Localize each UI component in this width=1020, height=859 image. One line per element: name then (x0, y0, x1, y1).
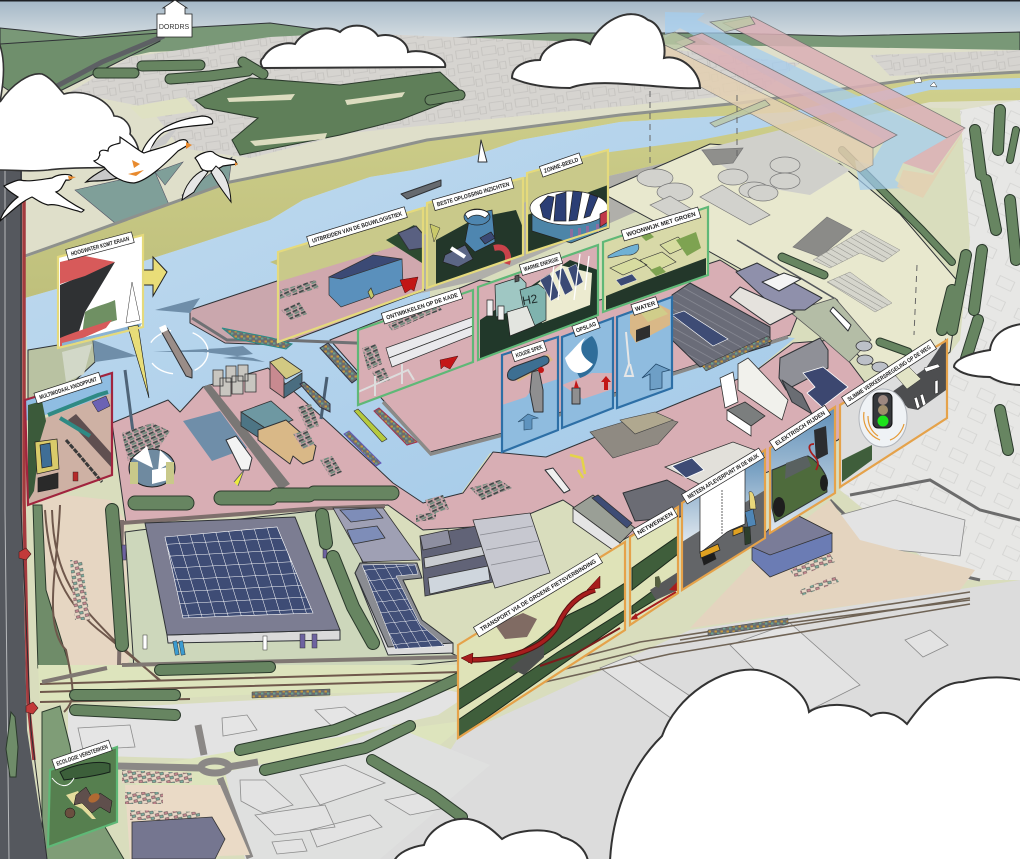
yellow excavators (570, 455, 585, 478)
wind turbines (550, 254, 589, 300)
train south-east (708, 618, 788, 636)
far town east (870, 50, 1020, 76)
train west (252, 689, 330, 698)
seagull left (0, 174, 84, 221)
pale tan west yard (40, 495, 130, 690)
up arrow (518, 414, 538, 430)
bat body (87, 792, 101, 804)
seagull right (182, 151, 238, 202)
boats and stacks south dock (416, 468, 570, 522)
wheels (773, 475, 828, 517)
blue boats east (702, 336, 772, 371)
sewage land (600, 144, 960, 377)
pale green bands (38, 665, 478, 805)
sailboat in view (126, 282, 140, 323)
green containers (388, 304, 442, 331)
treatment basins (637, 148, 852, 257)
frame yellow 2 content (427, 178, 523, 288)
teal fields (75, 157, 232, 223)
dark foliage (60, 762, 110, 780)
label: yellow frame 2: BESTE OPLOSSING INZICHTEN (436, 182, 510, 208)
label: blue frame 1: KOUDE SPEK (515, 345, 544, 360)
dark dock (203, 384, 290, 490)
far slab top (723, 17, 965, 138)
hydrogen plant (487, 275, 546, 336)
tree rows east (782, 110, 1016, 450)
label: yellow frame 3: ZONNE-BEELD (543, 157, 580, 175)
radar mast (125, 370, 133, 432)
label: green frame 2: WARME ENERGIE (523, 257, 559, 273)
yellow building (35, 439, 59, 492)
dark stripes building (782, 380, 812, 414)
northern pier rim (192, 318, 380, 344)
label: blue frame 3 (631, 297, 659, 315)
label: orange frame 3 (682, 448, 764, 504)
label: yellow detail frame: HOOGWATER KOMT ERAAN (71, 236, 130, 258)
grey hall with ridges (473, 513, 550, 588)
white warehouse (665, 442, 763, 488)
label: red frame: MULTIMODAAL KNOOPPUNT (39, 377, 98, 401)
railway west (40, 505, 460, 712)
label: yellow detail frame (66, 232, 134, 260)
container field west (122, 423, 170, 461)
orange frame 5 content (840, 338, 947, 487)
south land (pink) (112, 340, 878, 540)
frames (25, 150, 947, 847)
road behind east (830, 480, 1020, 580)
distant green hills (0, 23, 1020, 60)
label: orange frame 5: SLIMME VERKEERSREGELING OP DE WEG (847, 345, 933, 403)
yellow pointer (128, 325, 149, 398)
road west (42, 657, 462, 682)
H2 text: H2 (521, 291, 539, 308)
second solar warehouse (355, 563, 453, 655)
long parking west (70, 560, 90, 620)
radar vehicles (914, 364, 940, 409)
outlined lots (600, 500, 965, 721)
label: green frame 2 (519, 253, 563, 275)
river and harbour water (25, 78, 1020, 505)
top edge line (0, 0, 1020, 2)
pump tower (530, 370, 543, 412)
grey lots south-west (225, 725, 490, 859)
recycling yard (590, 412, 678, 458)
garden buildings (610, 237, 688, 275)
traffic light (873, 393, 892, 428)
solar panels on masts (540, 264, 583, 301)
near slab side (650, 38, 873, 172)
motorway (0, 170, 47, 859)
pale house (895, 365, 921, 389)
stacks on yard (790, 554, 839, 596)
white roof top (762, 273, 801, 291)
orange frame 4 content (770, 407, 835, 533)
red heat arrow (494, 247, 508, 264)
dark road (650, 572, 678, 600)
storage tanks round (856, 341, 888, 372)
quay cranes and vessels (222, 328, 417, 466)
red arrow (440, 356, 458, 369)
levee road (25, 72, 1020, 256)
field strips (813, 230, 900, 312)
purple building (333, 508, 420, 562)
crane bridge (358, 364, 414, 396)
green car (772, 456, 827, 522)
domed silo with white panels (129, 446, 175, 487)
white sensor arc (52, 778, 74, 786)
cross-section blocks: blue channel (650, 12, 965, 198)
brown road around ground (119, 506, 385, 669)
pale hall (640, 306, 668, 322)
frame green 1 content (358, 290, 473, 405)
grey quay road (330, 150, 760, 300)
blue building yard (752, 510, 832, 577)
west tree mass (33, 505, 70, 668)
white sensor circle (859, 389, 907, 447)
northern pier (190, 248, 425, 345)
distant road (42, 36, 164, 94)
frame yellow 3 content (527, 150, 609, 253)
red frame content (25, 373, 112, 505)
dark roof building (623, 480, 700, 521)
town north bank (70, 33, 800, 158)
center pier (330, 260, 800, 452)
median shrub (6, 712, 18, 777)
buildings south-west (240, 765, 450, 854)
frame green 2 content (478, 245, 598, 360)
brown mound (495, 613, 537, 639)
label: orange frame 4: ELEKTRISCH RIJDEN (775, 411, 827, 447)
yellow arrow (143, 257, 167, 296)
label: blue frame 3: WATER (634, 301, 657, 313)
barge on river (401, 180, 441, 199)
railway south-east (460, 592, 970, 692)
pale field (130, 97, 197, 119)
north olive bank (25, 72, 1020, 298)
white tubes (386, 317, 473, 367)
round tank with striped roof (530, 191, 609, 243)
grey treatment block (700, 130, 850, 195)
label: yellow frame 3 (539, 153, 583, 177)
lower west lot (68, 690, 468, 760)
orange frame 1 content (458, 542, 625, 738)
blue frames content (502, 297, 672, 452)
frame green bottom content (48, 747, 117, 847)
label: red frame (34, 372, 102, 404)
label: orange frame 3: METEEN AFLEVERPUNT IN DE WIJK (687, 453, 761, 501)
cloud bottom right (610, 670, 1020, 859)
cloud top left (0, 40, 139, 171)
dashed drop lines (650, 58, 917, 335)
big blue up arrow (642, 364, 670, 390)
wooden hall (258, 420, 316, 464)
grey tanks east (779, 338, 828, 390)
blue tower (443, 209, 495, 267)
people (570, 224, 599, 237)
forest mass north bank (98, 62, 465, 155)
white ridge roofs east (730, 287, 795, 325)
sky (0, 0, 1020, 60)
arrow heads (461, 576, 600, 664)
orange frame 3 content (682, 450, 765, 590)
cloud top right of centre (512, 14, 700, 88)
purple barge (92, 396, 110, 412)
tree line along warehouse (135, 493, 392, 503)
glass hall (241, 401, 293, 444)
label: blue frame 2 (572, 317, 600, 337)
near slab top (675, 33, 897, 148)
teal gantry crane (48, 392, 108, 436)
small boats east (914, 77, 937, 87)
red top (538, 367, 544, 373)
lot outlines (78, 707, 367, 750)
label: green bottom frame: ECOLOGIE VERSTERKEN (56, 745, 109, 768)
label: orange frame 2 (632, 507, 678, 539)
west shore tip (62, 344, 92, 382)
blue globe with white swirl (576, 336, 598, 378)
label: orange frame 5 (842, 340, 936, 406)
water shadows (93, 298, 265, 461)
frame yellow 1 content (278, 208, 423, 342)
land east of hall (790, 298, 871, 362)
sailboat on river (478, 140, 487, 162)
white truck (700, 462, 745, 565)
cyclist (655, 576, 661, 588)
dark mound (510, 643, 544, 675)
big solar warehouse (145, 517, 340, 643)
pale ground (530, 265, 592, 323)
label: blue frame 1 (511, 340, 547, 362)
bat wings (74, 787, 112, 813)
boundary road sewage land (737, 240, 853, 333)
doors (636, 325, 650, 342)
yellow pointer (430, 224, 440, 242)
charging cable (809, 444, 818, 470)
signal arcs (864, 412, 904, 440)
top signpost (157, 0, 192, 37)
dark quay strip (68, 414, 112, 468)
pink tower building (270, 357, 302, 398)
orange frame 2 content (630, 507, 678, 625)
charging post (814, 426, 828, 460)
small animal (65, 808, 75, 818)
dark coil stacks (362, 344, 390, 384)
land at west shore (28, 340, 95, 400)
red arrow (632, 592, 676, 618)
red locomotive (73, 472, 78, 481)
label: green frame 3: WOONWIJK MET GROEN (626, 212, 697, 239)
burner (572, 388, 580, 404)
yacht (226, 436, 252, 470)
green verge south-west (42, 706, 125, 859)
south olive bank (270, 88, 1020, 275)
tan south lot (125, 785, 250, 859)
frame green 3 content (603, 207, 708, 312)
warehouse ground (125, 508, 465, 685)
trucks (122, 544, 327, 655)
forest left of the distant road (0, 33, 160, 98)
long grey-green building with solar (573, 495, 635, 555)
cloud bottom centre (394, 819, 588, 859)
label: yellow frame 1: UITBREIDEN VAN DE BOUWLOGISTIEK (312, 211, 404, 245)
flame (574, 380, 579, 388)
yellow detail frame content (58, 235, 143, 348)
label: blue frame 2: OPSLAG (576, 322, 598, 335)
blue office with solar roof (329, 255, 403, 307)
label: green frame 1: ONTWIKKELEN OP DE KADE (386, 293, 459, 322)
lower grey base (380, 580, 1020, 859)
top signpost: DORDRS (159, 24, 189, 31)
purple roofs east (736, 263, 822, 310)
pier rim (383, 337, 788, 454)
windows (785, 456, 811, 479)
label: orange frame 1: TRANSPORT VIA DE GROENE FIETSVERBINDING (480, 559, 598, 633)
container stacks (293, 404, 342, 477)
hedge (386, 225, 422, 263)
red arrow marks (19, 548, 38, 714)
container stack dark (280, 280, 319, 320)
capsule (507, 356, 549, 380)
seagull large (86, 116, 213, 183)
wagons (66, 440, 102, 482)
red arrow (400, 277, 418, 293)
roundabout (115, 725, 258, 858)
tree rows west (10, 510, 495, 817)
tan yard (690, 500, 975, 628)
ship with wake (148, 325, 208, 378)
tanks (213, 365, 256, 396)
pond (608, 244, 639, 258)
big solar hall east (672, 283, 770, 367)
purple hall (398, 226, 423, 250)
cloud right (954, 324, 1020, 385)
parking south lot (122, 770, 200, 820)
east city (840, 100, 1020, 580)
white van east (830, 307, 851, 331)
cloud top centre (261, 26, 445, 68)
small red arrow (601, 376, 611, 390)
red path arrow (468, 590, 595, 660)
label: orange frame 2: NETWERKEN (637, 511, 674, 537)
mixed hall (420, 524, 493, 596)
white mast (625, 332, 633, 376)
purple building south (132, 817, 225, 859)
cyclist (744, 492, 756, 545)
north bank land (0, 44, 1020, 260)
navy L building (803, 367, 848, 407)
label: green bottom frame (52, 740, 112, 770)
white silos (720, 358, 788, 436)
tree edge (28, 401, 46, 501)
yellow crane (234, 470, 244, 486)
